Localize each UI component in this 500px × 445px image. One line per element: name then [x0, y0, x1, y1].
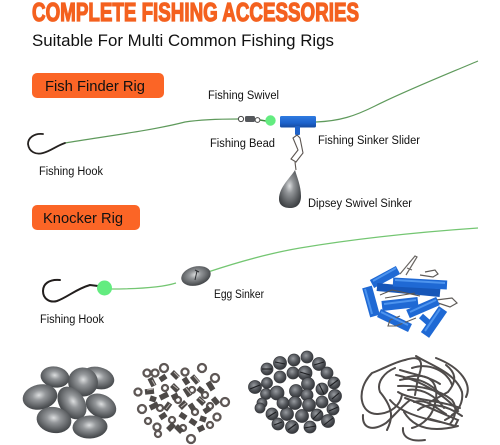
icon: snap clip [291, 135, 303, 170]
badge: Knocker Rig [32, 205, 140, 230]
icon: dipsey sinker [279, 170, 301, 208]
label: fishing hook 2: Fishing Hook [40, 314, 104, 326]
icon: fishing hook 1 [28, 134, 65, 154]
product: split shot sinkers [248, 351, 342, 434]
product: loose hooks [362, 356, 468, 440]
label: fishing bead: Fishing Bead [210, 138, 275, 150]
badge: Knocker Rig: Knocker Rig [43, 211, 123, 227]
product: blue sinker sliders [365, 256, 457, 335]
icon: egg sinker [179, 263, 213, 289]
product: egg sinkers [20, 363, 120, 439]
label: dipsey swivel sinker: Dipsey Swivel Sinker [308, 198, 412, 210]
subtitle: Suitable For Multi Common Fishing Rigs [32, 32, 334, 50]
label: fishing swivel: Fishing Swivel [208, 90, 279, 102]
label: fishing sinker slider: Fishing Sinker Slider [318, 135, 420, 147]
icon: sinker slider [280, 116, 316, 135]
label: egg sinker: Egg Sinker [214, 289, 264, 301]
icon: fishing swivel [238, 116, 266, 122]
badge: Fish Finder Rig [32, 73, 164, 98]
icon: fishing bead [265, 115, 276, 126]
label: fishing hook: Fishing Hook [39, 166, 103, 178]
diagram: fish finder rig line [65, 61, 478, 143]
icon: fishing hook 2 [43, 280, 98, 302]
badge: Fish Finder Rig: Fish Finder Rig [45, 79, 145, 95]
icon: green bead [97, 280, 112, 296]
product: barrel swivels [134, 364, 229, 443]
diagram: knocker rig line [110, 228, 478, 289]
